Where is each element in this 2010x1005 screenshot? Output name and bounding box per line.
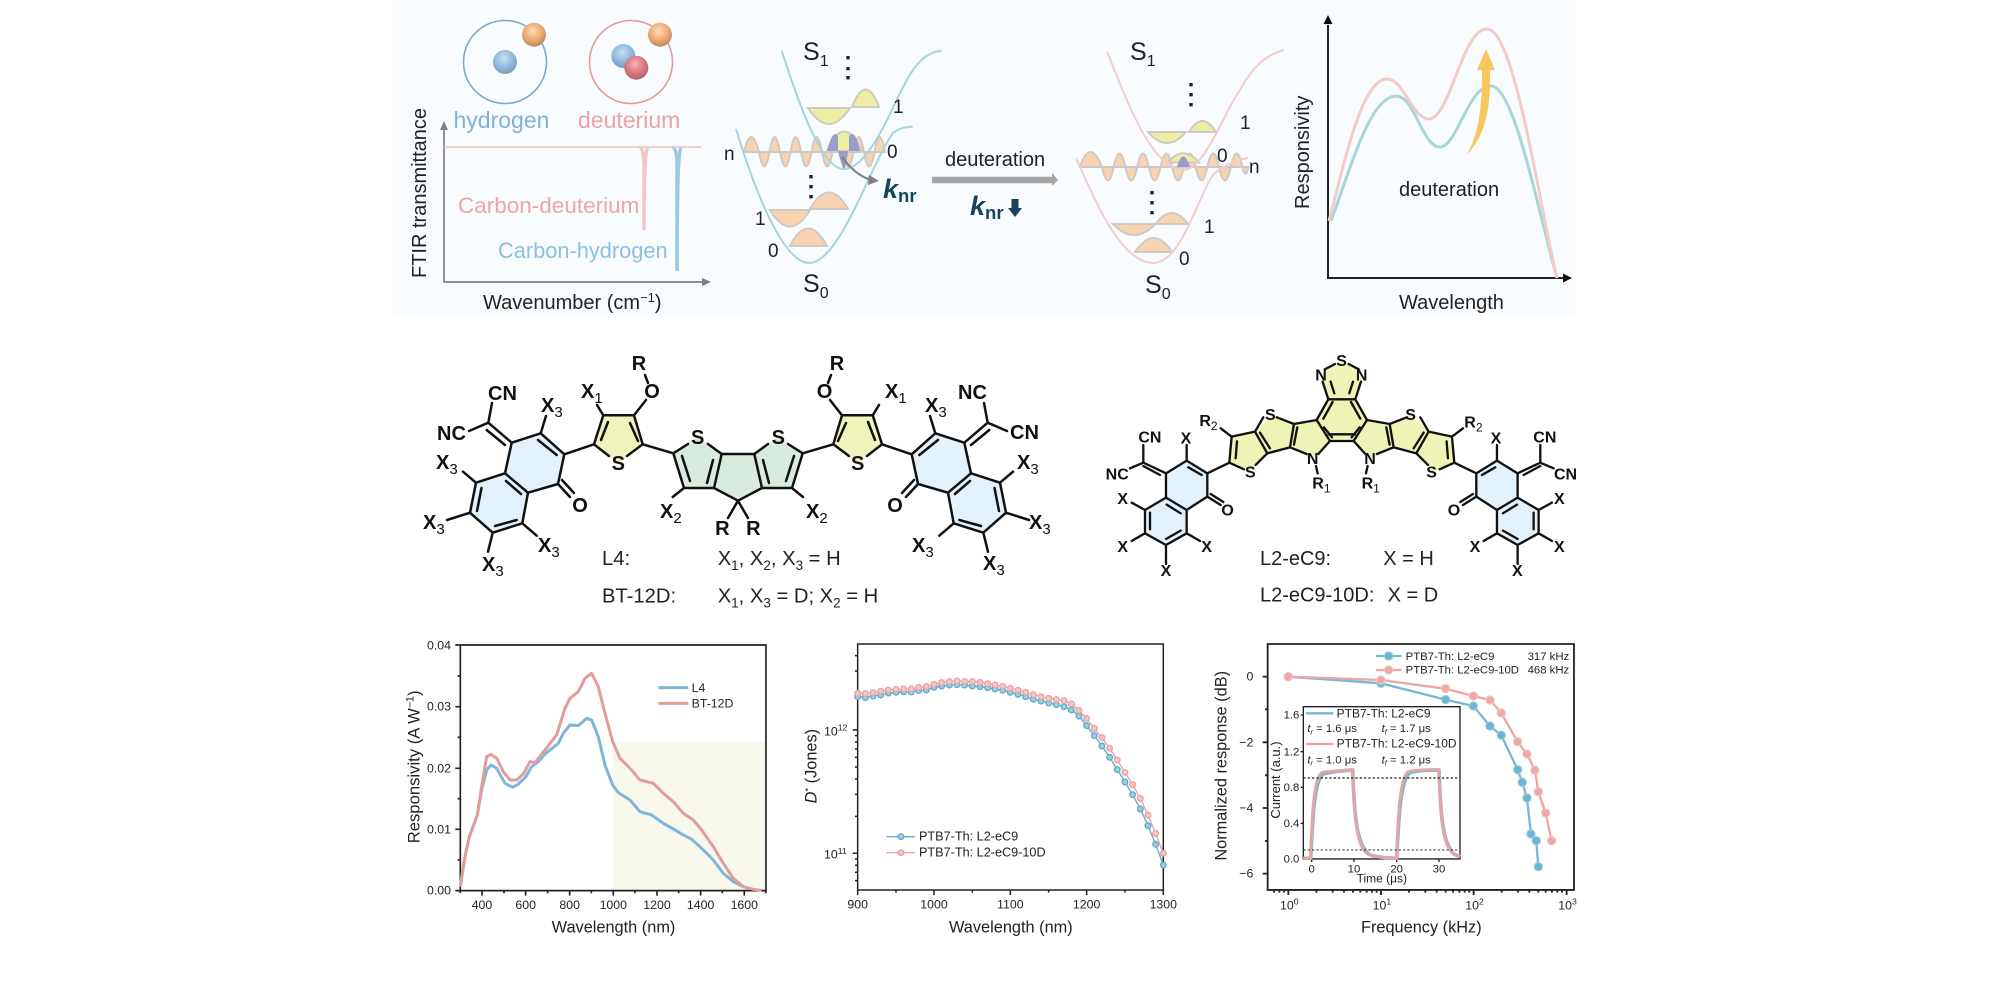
caption: L2-eC9-10D — [1260, 585, 1438, 607]
legend: PTB7-Th: L2-eC9-10D — [1406, 664, 1519, 676]
atom labels: X — [1029, 512, 1042, 534]
labels: states: S — [1145, 271, 1162, 299]
atom labels: X — [1117, 491, 1128, 508]
atom labels: 1 — [1373, 481, 1380, 495]
x axis title: wavenumber: ) — [655, 292, 662, 314]
atom labels: X — [1491, 430, 1502, 447]
labels: states: 1 — [1240, 113, 1251, 134]
arrow: responsivity increase — [1467, 49, 1495, 155]
legend: PTB7-Th: L2-eC9 — [919, 830, 1018, 844]
legend: PTB7-Th: L2-eC9 — [1406, 651, 1494, 663]
atom labels: CN — [1533, 429, 1556, 446]
x axis title: wavenumber: Wavenumber (cm — [483, 292, 640, 314]
atom labels: R — [1199, 413, 1211, 430]
atom labels: NC — [958, 382, 987, 404]
molecule: L4 / BT-12D — [423, 353, 1051, 611]
caption: BT-12D: = H — [841, 586, 878, 608]
labels: states: 1 — [1147, 53, 1156, 70]
caption: L4 — [602, 548, 841, 573]
x tick labels: 1300 — [1150, 897, 1177, 911]
plot frame and ticks — [1263, 644, 1574, 895]
labels: states: n — [724, 144, 735, 165]
y tick labels: 0.04 — [427, 638, 451, 652]
x tick labels: 600 — [515, 898, 536, 912]
x axis title: Wavelength (nm) — [949, 919, 1073, 937]
caption: L2-eC9-10D: L2-eC9-10D: — [1260, 585, 1374, 607]
S0 level 1 — [770, 192, 848, 226]
atom labels: X — [436, 452, 449, 474]
atom labels: X — [1201, 539, 1212, 556]
labels: states: S — [803, 38, 820, 66]
atom labels: R — [746, 518, 761, 540]
y axis title: * — [803, 788, 813, 792]
caption: L4: 2 — [763, 558, 771, 573]
atom labels: X — [1017, 452, 1030, 474]
caption: BT-12D — [602, 586, 878, 611]
labels: states: 1 — [1204, 217, 1215, 238]
atom labels: X — [885, 381, 898, 403]
labels: states: 0 — [1162, 286, 1171, 303]
inset y tick labels: 0.8 — [1284, 782, 1299, 794]
caption: BT-12D: 1 — [731, 596, 739, 611]
caption: BT-12D: 3 — [763, 596, 771, 611]
caption: BT-12D: 2 — [833, 596, 841, 611]
atom labels: X — [983, 553, 996, 575]
ellipsis dots — [809, 56, 850, 198]
labels: states: 1 — [893, 97, 904, 118]
caption: L2-eC9: X = H — [1383, 548, 1434, 570]
atom labels: 3 — [1042, 521, 1051, 538]
atom labels: N — [1307, 451, 1318, 468]
curve: L2-eC9 — [1288, 677, 1538, 867]
inset legend text: = 1.0 μs — [1313, 754, 1357, 766]
label: deuteration: deuteration — [1399, 179, 1499, 201]
inset legend text: t — [1307, 723, 1311, 735]
y tick labels: 11 — [838, 846, 847, 856]
axes — [1324, 15, 1572, 282]
y tick labels: 0.00 — [427, 884, 451, 898]
y tick labels — [824, 723, 848, 862]
label: knr: k — [883, 174, 898, 204]
chart: frequency response — [1213, 644, 1577, 937]
diagram: energy levels before deuteration — [724, 38, 942, 302]
atom labels: 1 — [1324, 481, 1331, 495]
S1 level 1 — [808, 90, 879, 124]
inset y tick labels: 1.6 — [1284, 710, 1299, 722]
inset y tick labels — [1284, 710, 1299, 866]
atom labels: X — [538, 535, 551, 557]
atom labels: 3 — [554, 404, 563, 421]
inset legend text: r — [1310, 759, 1313, 768]
legend: L4 — [692, 681, 705, 695]
x tick labels: 3 — [1572, 897, 1577, 907]
inset frame and ticks — [1301, 707, 1460, 862]
x axis title: Wavelength (nm) — [552, 919, 675, 937]
labels: states: 0 — [1217, 146, 1228, 167]
y tick labels: 10 — [824, 848, 838, 862]
panel: FTIR isotope schematic — [409, 20, 711, 314]
left half bonds — [1130, 364, 1355, 564]
x axis title: Wavelength — [1399, 292, 1504, 314]
atom labels: X — [925, 395, 938, 417]
labels: states: S — [1130, 38, 1147, 66]
x tick labels: 0 — [1294, 897, 1299, 907]
infrared highlight region — [613, 742, 766, 891]
atom labels: X — [1181, 430, 1192, 447]
caption: BT-12D: , X — [739, 586, 764, 608]
inset x title: Time (μs) — [1357, 872, 1407, 886]
atom labels: R — [830, 353, 845, 375]
inset trace: L2-eC9-10D — [1303, 770, 1460, 858]
y axis title: ) — [404, 690, 423, 696]
inset legend text: t — [1307, 754, 1311, 766]
y tick labels: 12 — [838, 723, 848, 733]
atom labels: R — [1312, 475, 1324, 492]
x tick labels: 1400 — [687, 898, 714, 912]
label: knr: nr — [898, 185, 917, 206]
curve: L2-eC9 — [858, 685, 1163, 865]
atom labels: X — [1470, 539, 1481, 556]
inset trace: L2-eC9 — [1303, 770, 1460, 858]
caption: BT-12D: = D; X — [771, 586, 834, 608]
plot frame and ticks — [455, 645, 766, 896]
inset legend text: f — [1385, 727, 1388, 736]
right thiophene — [803, 375, 882, 463]
atom labels: X — [660, 501, 673, 523]
labels: states — [724, 38, 904, 302]
y tick labels — [1239, 670, 1253, 881]
right half bonds — [1342, 364, 1554, 564]
caption: L4: X — [718, 548, 731, 570]
atom labels: 2 — [1476, 420, 1483, 434]
right end group — [882, 403, 1029, 552]
curve: BT-12D — [460, 673, 762, 890]
S1 potential curve — [1107, 50, 1284, 170]
atom labels: N — [1364, 451, 1376, 468]
labels: states: 0 — [820, 285, 829, 302]
curve: L2-eC9-10D — [858, 681, 1163, 853]
end group fills — [1145, 461, 1539, 545]
y tick labels: 0.01 — [427, 822, 451, 836]
atom labels: O — [887, 495, 903, 517]
label: deuteration: deuteration — [945, 149, 1045, 171]
atom labels: R — [1362, 475, 1373, 492]
atom labels: NC — [437, 423, 466, 445]
atom labels: O — [572, 495, 588, 517]
y axis title: −1 — [404, 696, 416, 708]
atom labels: S — [612, 453, 625, 475]
y axis title: Normalized response (dB) — [1213, 671, 1231, 861]
inset x tick labels — [1308, 863, 1445, 875]
central core — [673, 437, 803, 518]
atom labels: O — [817, 381, 832, 403]
caption: BT-12D: X — [718, 586, 731, 608]
legend: BT-12D — [692, 696, 734, 710]
inset x tick labels: 0 — [1308, 863, 1315, 875]
atom labels: CN — [1138, 429, 1161, 446]
x tick labels: 1 — [1386, 897, 1391, 907]
caption: L4: = H — [803, 548, 841, 570]
S0 level 0 — [790, 228, 827, 246]
atom labels: 3 — [551, 544, 560, 561]
atom labels: N — [1315, 368, 1327, 385]
S0 potential curve — [736, 127, 913, 263]
legend: 468 kHz — [1528, 664, 1570, 676]
atom labels: 2 — [673, 510, 682, 527]
icon: hydrogen atom — [464, 20, 546, 104]
y axis title: D — [803, 791, 821, 803]
chart: specific detectivity — [803, 644, 1177, 937]
y tick labels: 0.02 — [427, 761, 451, 775]
inset y tick labels: 0.4 — [1284, 818, 1299, 830]
atom labels: X — [806, 501, 819, 523]
atom labels: X — [541, 395, 554, 417]
legend: 317 kHz — [1528, 651, 1570, 663]
plot frame and ticks — [853, 644, 1163, 895]
S1 level 0 — [1168, 153, 1199, 167]
atom labels: R — [715, 518, 730, 540]
inset legend text: f — [1385, 759, 1388, 768]
molecule: L2-eC9 / L2-eC9-10D — [1106, 353, 1577, 607]
x tick labels: 10 — [1373, 898, 1386, 912]
S0 level 0 — [1135, 238, 1172, 252]
inset: transient photocurrent — [1268, 706, 1460, 886]
atom labels: 3 — [495, 563, 504, 580]
x tick labels: 800 — [559, 898, 580, 912]
x tick labels — [472, 898, 758, 912]
atom labels: O — [1221, 503, 1234, 520]
inset legend text: t — [1382, 723, 1386, 735]
chart: responsivity spectrum — [404, 638, 766, 937]
legend: PTB7-Th: L2-eC9-10D — [919, 846, 1046, 860]
icon: deuterium atom — [590, 20, 672, 104]
curve: after deuteration — [1329, 29, 1557, 278]
atom labels: X — [1161, 563, 1172, 580]
inset y title: Current (a.u.) — [1268, 741, 1283, 819]
inset y tick labels: 0.0 — [1284, 854, 1299, 866]
x tick labels: 400 — [472, 898, 492, 912]
inset legend text: r — [1310, 727, 1313, 736]
atom labels: X — [1554, 539, 1565, 556]
labels: states: 0 — [1179, 249, 1190, 270]
atom labels: S — [691, 427, 704, 449]
y axis title: (Jones) — [803, 729, 821, 788]
atom labels: R — [632, 353, 647, 375]
vibrational wave n — [744, 137, 885, 166]
x axis title: wavenumber: −1 — [640, 290, 655, 305]
labels: states: 0 — [887, 142, 898, 163]
left thiophene — [594, 375, 673, 463]
inset x tick labels: 10 — [1348, 863, 1360, 875]
diagram: energy levels after deuteration — [1076, 38, 1284, 303]
x tick labels: 2 — [1479, 897, 1484, 907]
atom labels: X — [482, 554, 495, 576]
atom labels: S — [772, 427, 785, 449]
caption: L2-eC9 — [1260, 548, 1434, 570]
x tick labels: 1600 — [731, 898, 758, 912]
label: carbon-deuterium: Carbon-deuterium — [458, 193, 639, 218]
atom labels: 3 — [925, 544, 934, 561]
atom labels: 1 — [898, 390, 907, 407]
atom labels: X — [423, 512, 436, 534]
x tick labels: 1200 — [643, 898, 671, 912]
curve: L2-eC9-10D — [1288, 677, 1552, 841]
S1 level 1 — [1148, 121, 1216, 143]
x tick labels: 1000 — [920, 897, 948, 911]
y tick labels: −4 — [1239, 801, 1253, 815]
inset x tick labels: 20 — [1390, 863, 1403, 875]
atom labels — [423, 353, 1051, 580]
atom labels: S — [1265, 407, 1276, 424]
inset legend text — [1306, 706, 1457, 768]
FTIR spectrum lines — [444, 147, 701, 271]
y tick labels — [427, 638, 451, 898]
atom labels — [1106, 353, 1577, 580]
inset legend text: PTB7-Th: L2-eC9-10D — [1337, 737, 1457, 751]
atom labels: 3 — [449, 461, 458, 478]
y tick labels: 0 — [1246, 670, 1253, 684]
y axis title: Responsivity — [1292, 96, 1314, 209]
atom labels: 3 — [996, 562, 1005, 579]
inset legend text: PTB7-Th: L2-eC9 — [1337, 706, 1431, 720]
chart: schematic responsivity — [1292, 15, 1572, 314]
legend — [1376, 651, 1570, 676]
core fill — [1229, 361, 1454, 472]
labels: states: 1 — [820, 53, 829, 70]
label: deuterium: deuterium — [578, 107, 680, 133]
atom labels: CN — [1554, 466, 1577, 483]
legend — [887, 830, 1046, 860]
atom labels: X — [912, 535, 925, 557]
atom labels: O — [1448, 503, 1460, 520]
S0 level 1 — [1113, 213, 1188, 235]
caption: L4: , X — [771, 548, 796, 570]
atom labels: NC — [1106, 466, 1129, 483]
caption: BT-12D: BT-12D: — [602, 586, 676, 608]
atom labels: S — [1405, 407, 1416, 424]
x tick labels: 1000 — [600, 898, 627, 912]
left end group — [447, 403, 594, 552]
x tick labels: 10 — [1558, 898, 1572, 912]
panel: deuteration concept background — [393, 0, 1575, 315]
caption: L2-eC9: L2-eC9: — [1260, 548, 1331, 570]
y axis title: Responsivity (A W — [404, 708, 423, 843]
label: carbon-hydrogen: Carbon-hydrogen — [498, 238, 668, 263]
atom labels: X — [581, 381, 594, 403]
atom labels: 2 — [1211, 419, 1218, 433]
S1 potential curve — [782, 51, 942, 169]
atom labels: 3 — [938, 404, 947, 421]
inset y tick labels: 1.2 — [1284, 746, 1299, 758]
x tick labels — [1280, 897, 1577, 912]
grey process arrow — [932, 173, 1058, 186]
caption: L2-eC9-10D: X = D — [1388, 585, 1438, 607]
inset legend text: = 1.2 μs — [1387, 754, 1431, 766]
x tick labels: 10 — [1465, 898, 1479, 912]
atom labels: O — [644, 381, 660, 403]
x tick labels: 1200 — [1073, 897, 1100, 911]
x tick labels: 900 — [847, 897, 868, 911]
atom labels: 3 — [1030, 461, 1039, 478]
x tick labels — [847, 897, 1177, 911]
atom labels: 3 — [436, 521, 445, 538]
caption: L4: 3 — [796, 558, 803, 573]
curve: before deuteration — [1331, 86, 1557, 278]
labels: states: S — [803, 270, 820, 298]
axes: FTIR — [440, 121, 711, 286]
y tick labels: −2 — [1239, 735, 1253, 749]
inset x tick labels: 30 — [1433, 863, 1445, 875]
curve: L4 — [460, 718, 743, 887]
label: knr lowered: k — [970, 191, 985, 221]
inset threshold lines — [1303, 778, 1460, 850]
x axis title: Frequency (kHz) — [1361, 919, 1482, 937]
labels: states: 1 — [755, 209, 766, 230]
S1 level 0 with overlap — [827, 132, 862, 169]
y tick labels: 10 — [824, 724, 838, 738]
icon: down arrow — [1008, 199, 1022, 217]
inset legend text: = 1.6 μs — [1313, 723, 1357, 735]
atom labels: N — [1356, 368, 1367, 385]
x tick labels: 1100 — [997, 897, 1024, 911]
atom labels: CN — [488, 383, 517, 405]
atom labels: 2 — [819, 510, 828, 527]
atom labels: S — [1426, 464, 1437, 481]
atom labels: S — [1245, 464, 1256, 481]
y tick labels: 0.03 — [427, 700, 451, 714]
atom labels: R — [1464, 414, 1476, 431]
atom labels: CN — [1010, 422, 1039, 444]
legend — [658, 681, 734, 710]
caption: L4: L4: — [602, 548, 630, 570]
arrow: nonradiative decay — [842, 157, 879, 185]
y axis title: FTIR transmittance: FTIR transmittance — [409, 108, 431, 278]
y tick labels: −6 — [1239, 867, 1253, 881]
label: hydrogen: hydrogen — [454, 107, 549, 133]
atom labels: S — [1336, 353, 1347, 370]
caption: L4: 1 — [731, 558, 739, 573]
atom labels: X — [1512, 563, 1523, 580]
labels: states — [1130, 38, 1260, 303]
arrow: deuteration transition — [932, 149, 1058, 223]
inset legend text: t — [1382, 754, 1386, 766]
label: knr lowered: nr — [985, 202, 1004, 223]
x tick labels: 10 — [1280, 898, 1294, 912]
caption: L4: , X — [739, 548, 764, 570]
S0 potential curve — [1076, 158, 1248, 263]
atom labels: S — [851, 453, 864, 475]
atom labels: X — [1554, 491, 1565, 508]
atom labels: X — [1117, 539, 1128, 556]
vibrational wave n — [1080, 152, 1248, 180]
labels: states: 0 — [768, 241, 779, 262]
atom labels: 1 — [594, 390, 603, 407]
ellipsis dots — [1150, 83, 1193, 214]
labels: states: n — [1249, 157, 1260, 178]
inset legend text: = 1.7 μs — [1387, 723, 1431, 735]
